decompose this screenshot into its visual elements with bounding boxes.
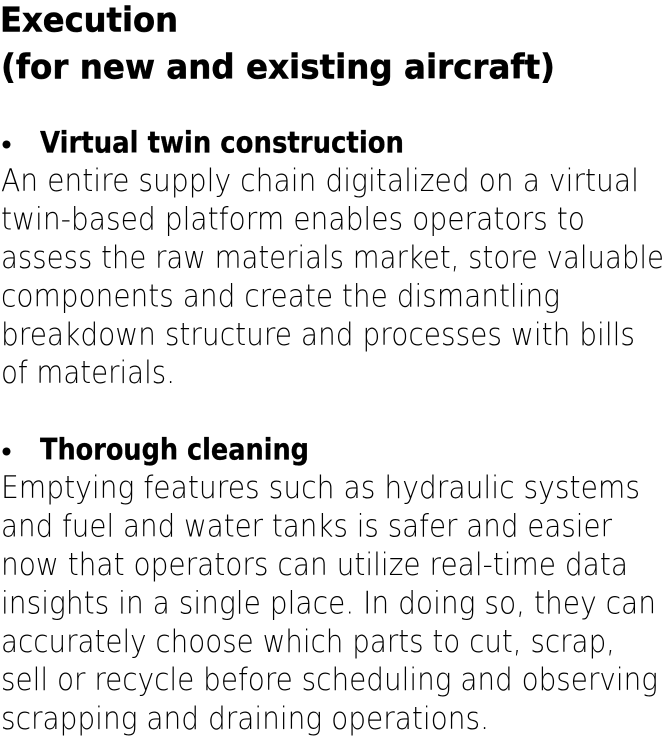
body text: virtual twin construction bbox=[1, 163, 664, 391]
heading: thorough cleaning: Thorough cleaning bbox=[40, 432, 309, 466]
bullet: virtual twin construction bbox=[2, 140, 10, 148]
section: virtual twin construction bbox=[1, 126, 664, 391]
body text: thorough cleaning: accurately choose which parts to cut, scrap, bbox=[1, 624, 615, 660]
heading: virtual twin construction: Virtual twin construction bbox=[40, 126, 404, 160]
body text: thorough cleaning: and fuel and water tanks is safer and easier bbox=[1, 508, 612, 544]
body text: virtual twin construction: components and create the dismantling bbox=[1, 278, 560, 314]
bullet: thorough cleaning bbox=[2, 448, 10, 456]
body text: virtual twin construction: twin-based platform enables operators to bbox=[1, 202, 585, 238]
body text: thorough cleaning bbox=[1, 470, 658, 737]
title: Execution bbox=[0, 0, 178, 40]
body text: virtual twin construction: of materials. bbox=[1, 355, 175, 391]
title bbox=[0, 0, 555, 86]
body text: thorough cleaning: scrapping and draining operations. bbox=[1, 701, 489, 737]
section: thorough cleaning bbox=[1, 432, 658, 737]
title: (for new and existing aircraft) bbox=[1, 48, 555, 86]
